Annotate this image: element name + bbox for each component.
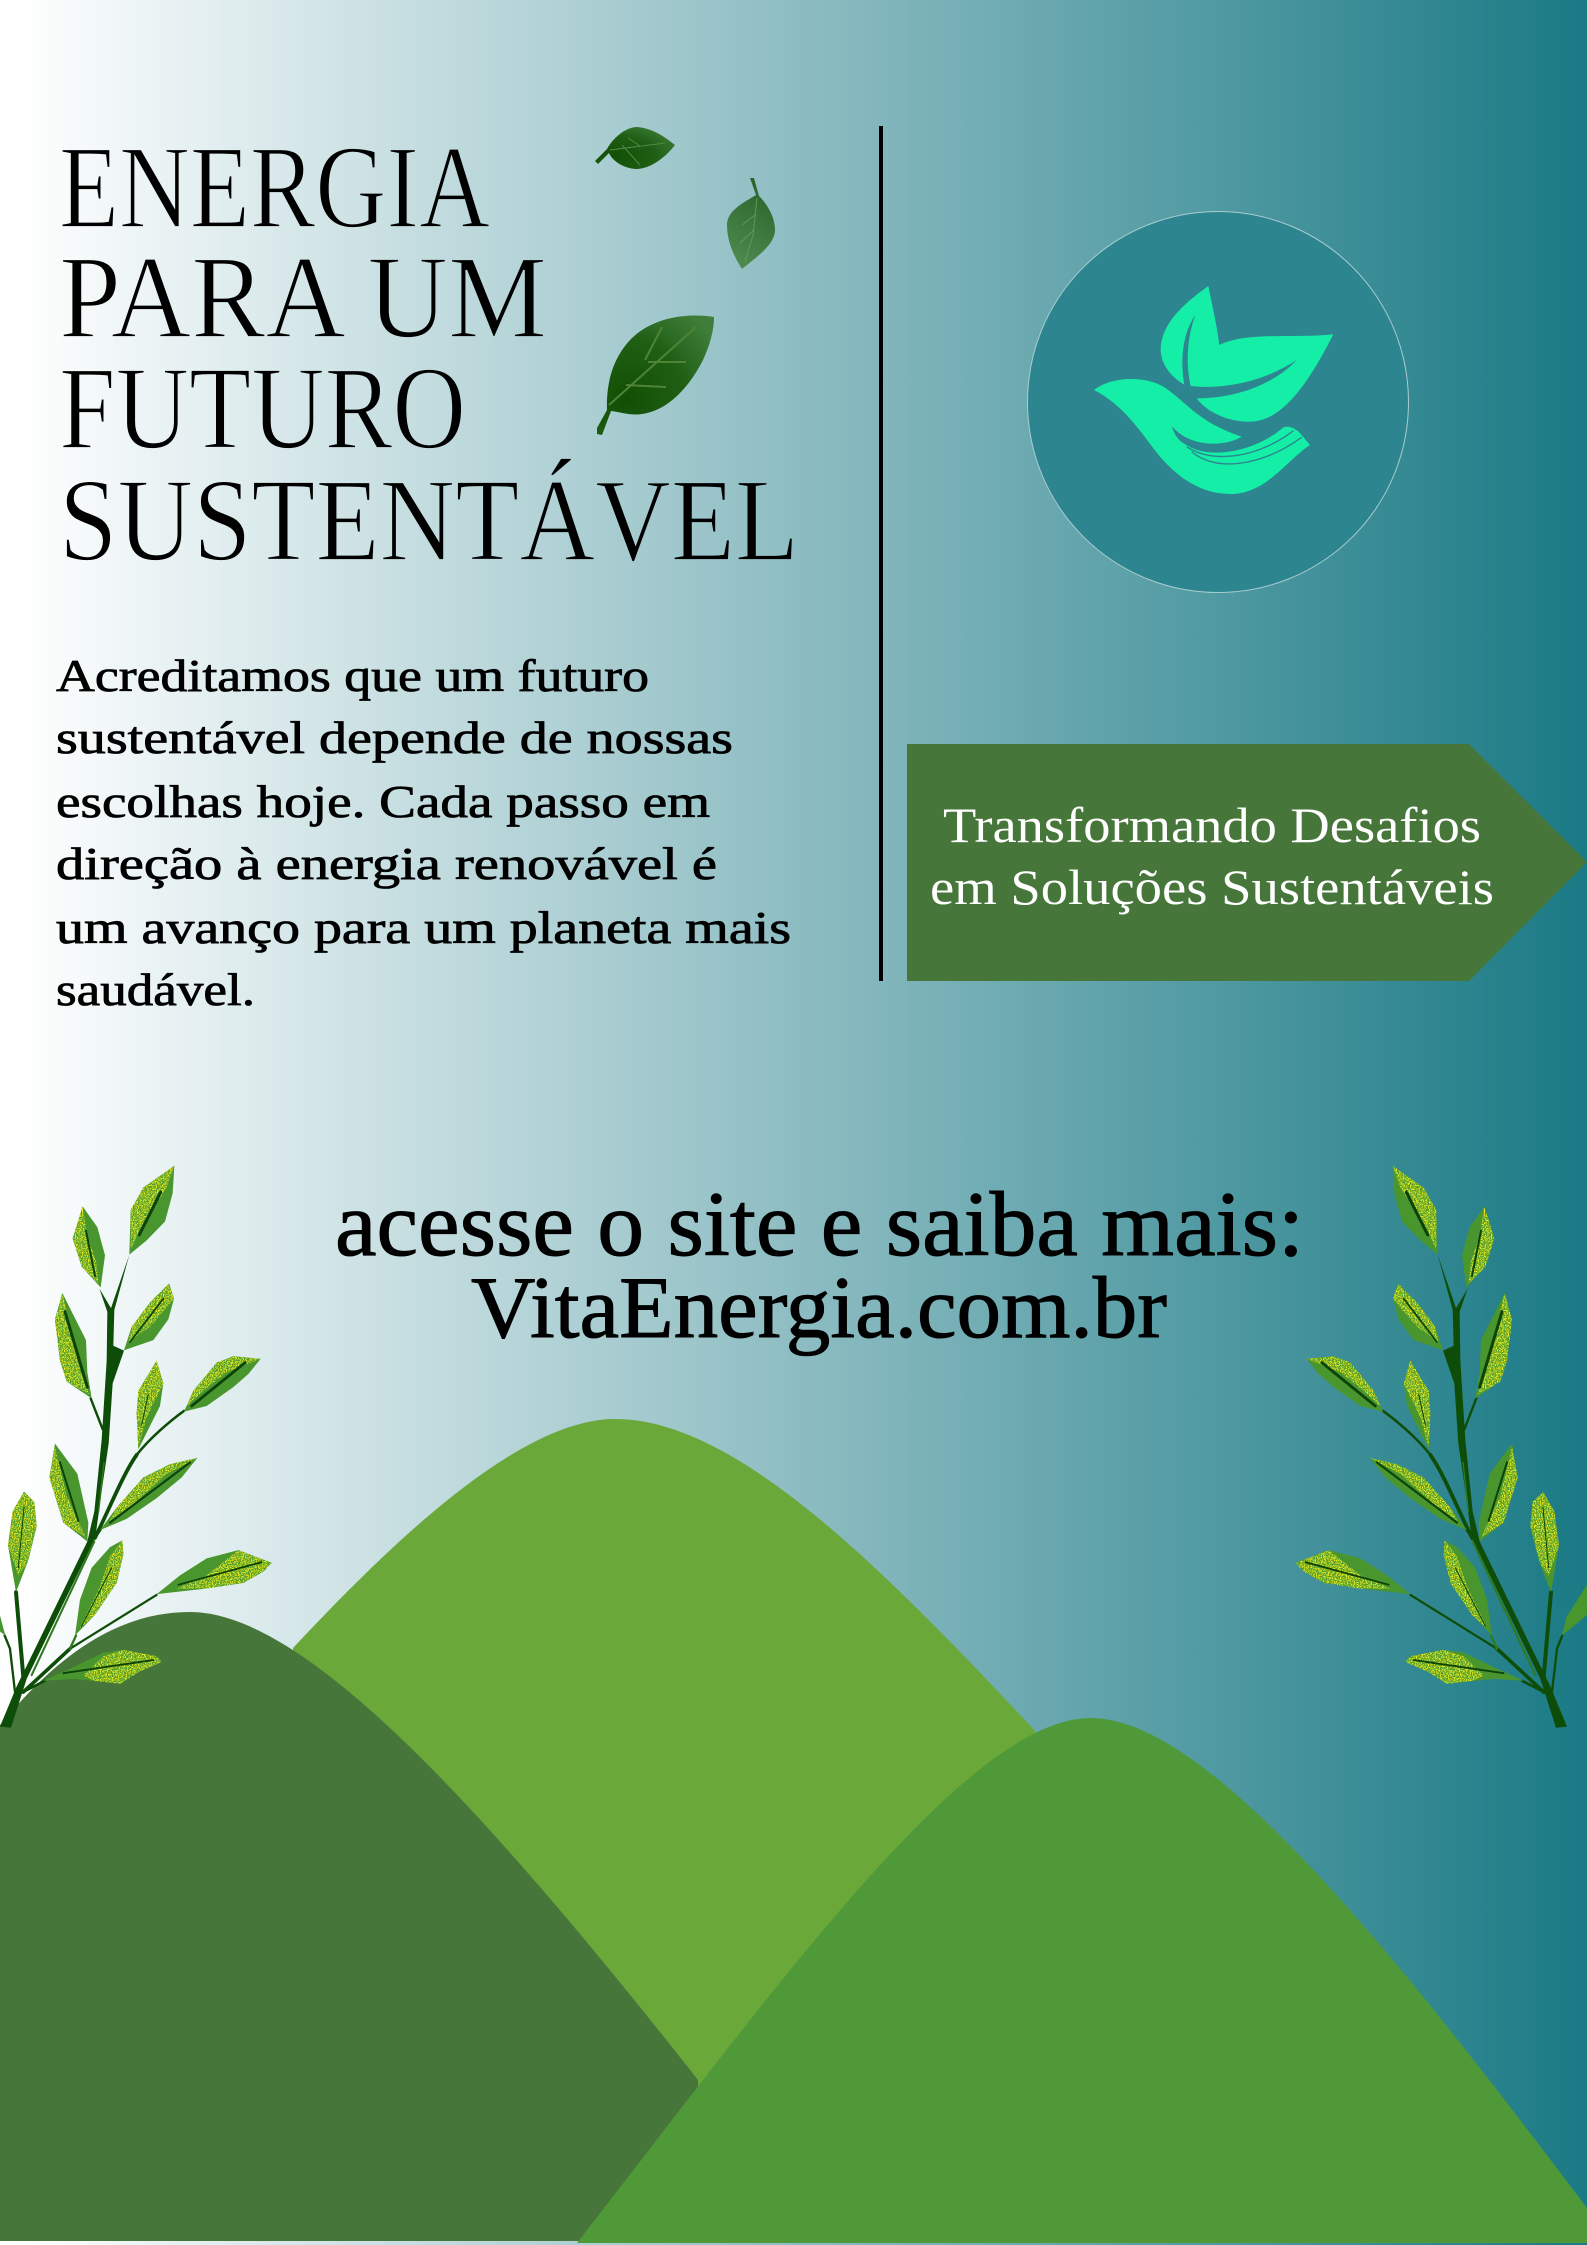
- hill: dark green left: [0, 1612, 700, 2241]
- body paragraph: Acreditamos que um futuro: [56, 650, 649, 701]
- call to action: VitaEnergia.com.br: [471, 1260, 1167, 1357]
- vertical divider: [879, 126, 883, 981]
- banner text: Transformando Desafios: [943, 797, 1481, 853]
- title: ENERGIA: [59, 121, 490, 253]
- plant: left branch: [0, 1166, 272, 1728]
- title: [59, 121, 799, 586]
- icon: leaf large: [597, 315, 714, 435]
- plant: right branch: [1295, 1166, 1587, 1728]
- icon: leaves and hand: [1094, 286, 1333, 494]
- hill: green front right: [577, 1718, 1587, 2243]
- logo: circle badge: [1028, 212, 1408, 592]
- banner text: em Soluções Sustentáveis: [930, 859, 1494, 915]
- body paragraph: um avanço para um planeta mais: [56, 902, 791, 953]
- body paragraph: saudável.: [56, 964, 255, 1015]
- arrow banner: [907, 744, 1587, 981]
- body paragraph: [56, 650, 791, 1015]
- icon: leaf small top: [595, 127, 675, 169]
- hill: light green middle: [293, 1419, 1037, 2100]
- body paragraph: escolhas hoje. Cada passo em: [56, 776, 710, 827]
- body paragraph: sustentável depende de nossas: [56, 712, 733, 763]
- icon: falling leaves: [595, 127, 775, 435]
- title: PARA UM: [59, 231, 547, 363]
- title: FUTURO: [59, 342, 466, 474]
- call to action: [335, 1173, 1304, 1357]
- banner text: [930, 797, 1494, 915]
- call to action: acesse o site e saiba mais:: [335, 1173, 1304, 1275]
- title: SUSTENTÁVEL: [59, 454, 799, 586]
- icon: leaf medium right: [727, 178, 775, 269]
- body paragraph: direção à energia renovável é: [56, 838, 717, 889]
